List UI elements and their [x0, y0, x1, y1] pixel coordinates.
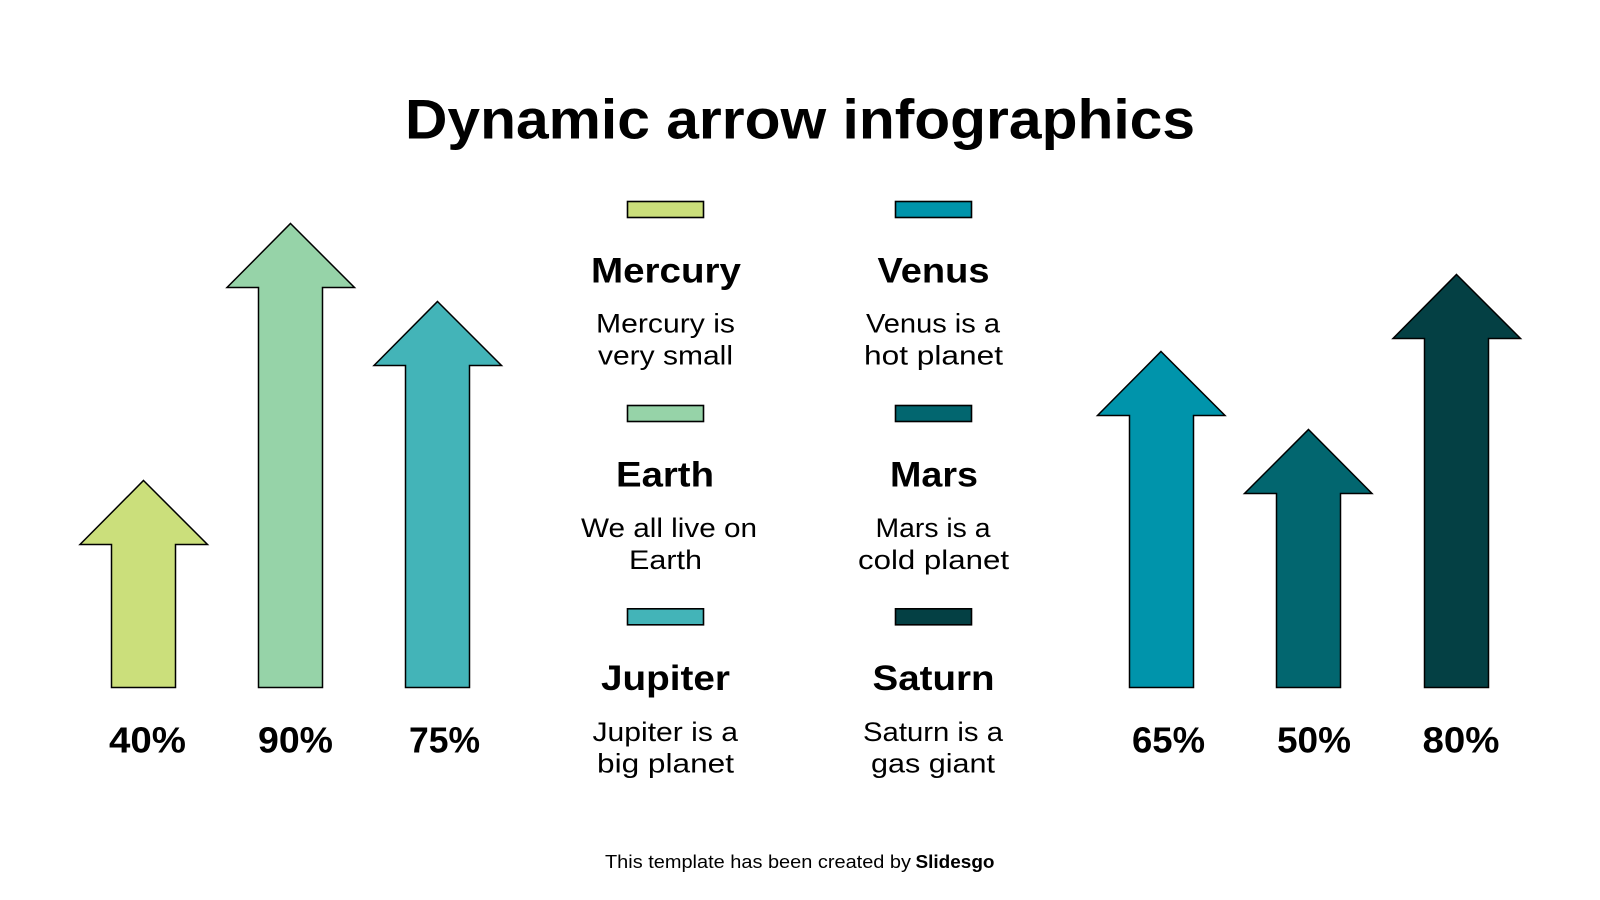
- text: Saturn description: Saturn is a: [863, 717, 1004, 747]
- text: Earth description: [581, 513, 757, 575]
- heading: Earth: Earth: [616, 455, 714, 494]
- swatch: Venus: [896, 202, 972, 218]
- text: Mars description: [858, 513, 1010, 575]
- text: Saturn description: gas giant: [871, 748, 996, 778]
- text: Jupiter description: Jupiter is a: [592, 717, 739, 747]
- swatch: Saturn: [896, 609, 972, 625]
- arrow: Jupiter 75%: [374, 302, 502, 688]
- value: 75%: 75%: [409, 720, 480, 760]
- panel: legend Mercury: [591, 202, 742, 370]
- heading: Jupiter: Jupiter: [601, 659, 730, 698]
- heading: Venus: Venus: [878, 251, 990, 290]
- panel: legend Jupiter: [592, 609, 739, 778]
- text: Jupiter description: big planet: [597, 748, 735, 778]
- arrow: Mercury 40%: [80, 480, 208, 688]
- arrow: Saturn 80%: [1393, 274, 1520, 688]
- value: 40%: 40%: [109, 720, 186, 760]
- title: Dynamic arrow infographics: [405, 88, 1195, 150]
- panel: legend Venus: [864, 202, 1004, 370]
- text: Venus description: [864, 308, 1004, 370]
- heading: Mercury: Mercury: [591, 251, 742, 290]
- value: 80%: 80%: [1422, 720, 1500, 760]
- arrow: Venus 65%: [1098, 352, 1225, 688]
- arrow: Earth 90%: [227, 224, 354, 688]
- text: Venus description: hot planet: [864, 340, 1004, 370]
- text: Venus description: Venus is a: [866, 308, 1001, 338]
- value: 50%: 50%: [1277, 720, 1351, 760]
- text: Saturn description: [863, 717, 1004, 778]
- heading: Saturn: Saturn: [872, 659, 994, 698]
- text: Earth description: We all live on: [581, 513, 757, 543]
- arrow: Mars 50%: [1244, 430, 1372, 688]
- swatch: Earth: [628, 406, 704, 422]
- text: Mercury description: Mercury is: [596, 308, 735, 338]
- panel: legend Mars: [858, 406, 1010, 575]
- text: Mercury description: [596, 308, 735, 370]
- swatch: Mars: [896, 406, 972, 422]
- swatch: Jupiter: [628, 609, 704, 625]
- heading: Mars: Mars: [890, 455, 978, 494]
- footer credit: This template has been created by: [605, 851, 912, 872]
- swatch: Mercury: [628, 202, 704, 218]
- value: 90%: 90%: [258, 720, 333, 760]
- panel: right arrows: [1098, 274, 1520, 760]
- panel: legend Earth: [581, 406, 757, 575]
- value: 65%: 65%: [1132, 720, 1205, 760]
- panel: legend Saturn: [863, 609, 1004, 778]
- text: Mars description: Mars is a: [876, 513, 992, 543]
- text: Mercury description: very small: [598, 340, 733, 370]
- text: Mars description: cold planet: [858, 545, 1010, 575]
- footer credit: Slidesgo: [916, 851, 994, 872]
- text: Earth description: Earth: [629, 545, 702, 575]
- panel: left arrows: [80, 224, 502, 760]
- text: Jupiter description: [592, 717, 739, 778]
